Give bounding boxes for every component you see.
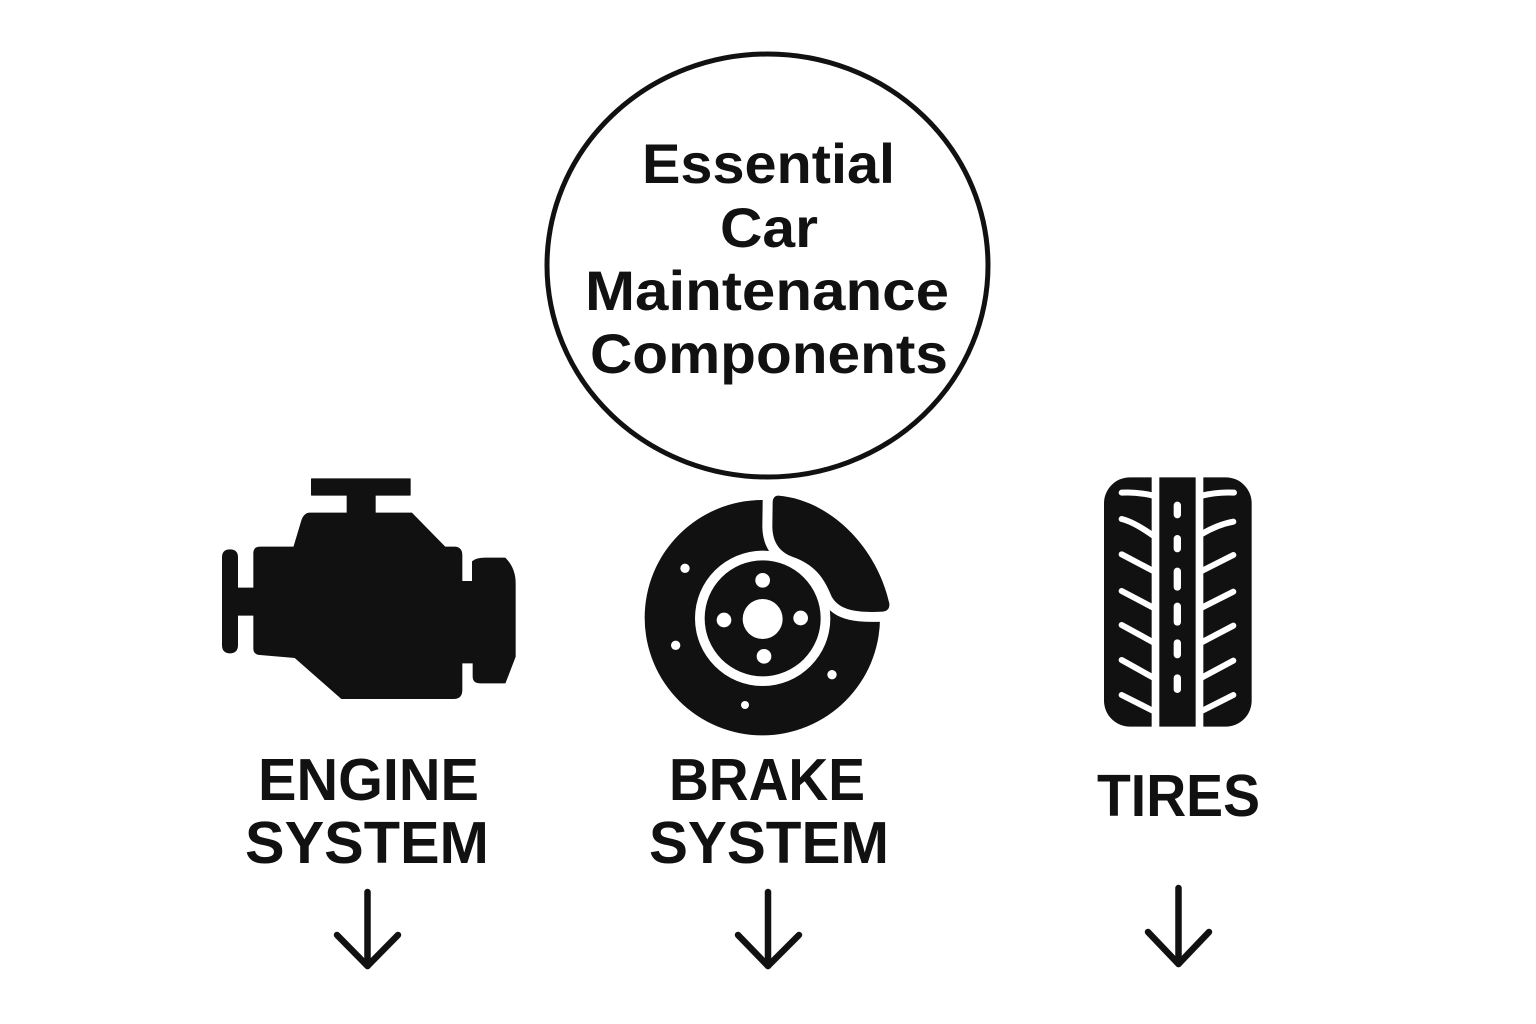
- title circle: [547, 54, 988, 477]
- icon: engine: [223, 479, 515, 698]
- label: brake system: BRAKE: [669, 747, 865, 813]
- arrow: tires: [1148, 888, 1209, 964]
- label: engine system: SYSTEM: [245, 810, 489, 876]
- tire body: [1104, 477, 1252, 727]
- circle outline: [547, 54, 988, 477]
- label: brake system: [649, 747, 889, 876]
- arrow: brake: [738, 892, 799, 966]
- icon: brake disc: [645, 496, 889, 735]
- caliper pad: [772, 496, 889, 612]
- label: engine system: [245, 747, 489, 876]
- title text: [585, 132, 949, 385]
- label: engine system: ENGINE: [258, 747, 479, 813]
- title text: Components: [590, 322, 948, 385]
- title text: Essential: [642, 132, 895, 195]
- label: tires: TIRES: [1097, 763, 1260, 829]
- hub: [705, 560, 821, 676]
- vertical grooves: [1152, 475, 1159, 728]
- arrow: engine: [337, 892, 398, 966]
- rotor: [645, 500, 880, 735]
- label: brake system: SYSTEM: [649, 810, 889, 876]
- center dashes: [1174, 502, 1181, 693]
- hub holes: [671, 564, 837, 709]
- rotor inner gap: [695, 551, 830, 686]
- title text: Car: [720, 196, 818, 259]
- icon: tire tread: [1104, 475, 1252, 728]
- tread ribs: [1122, 492, 1234, 711]
- title text: Maintenance: [585, 259, 949, 322]
